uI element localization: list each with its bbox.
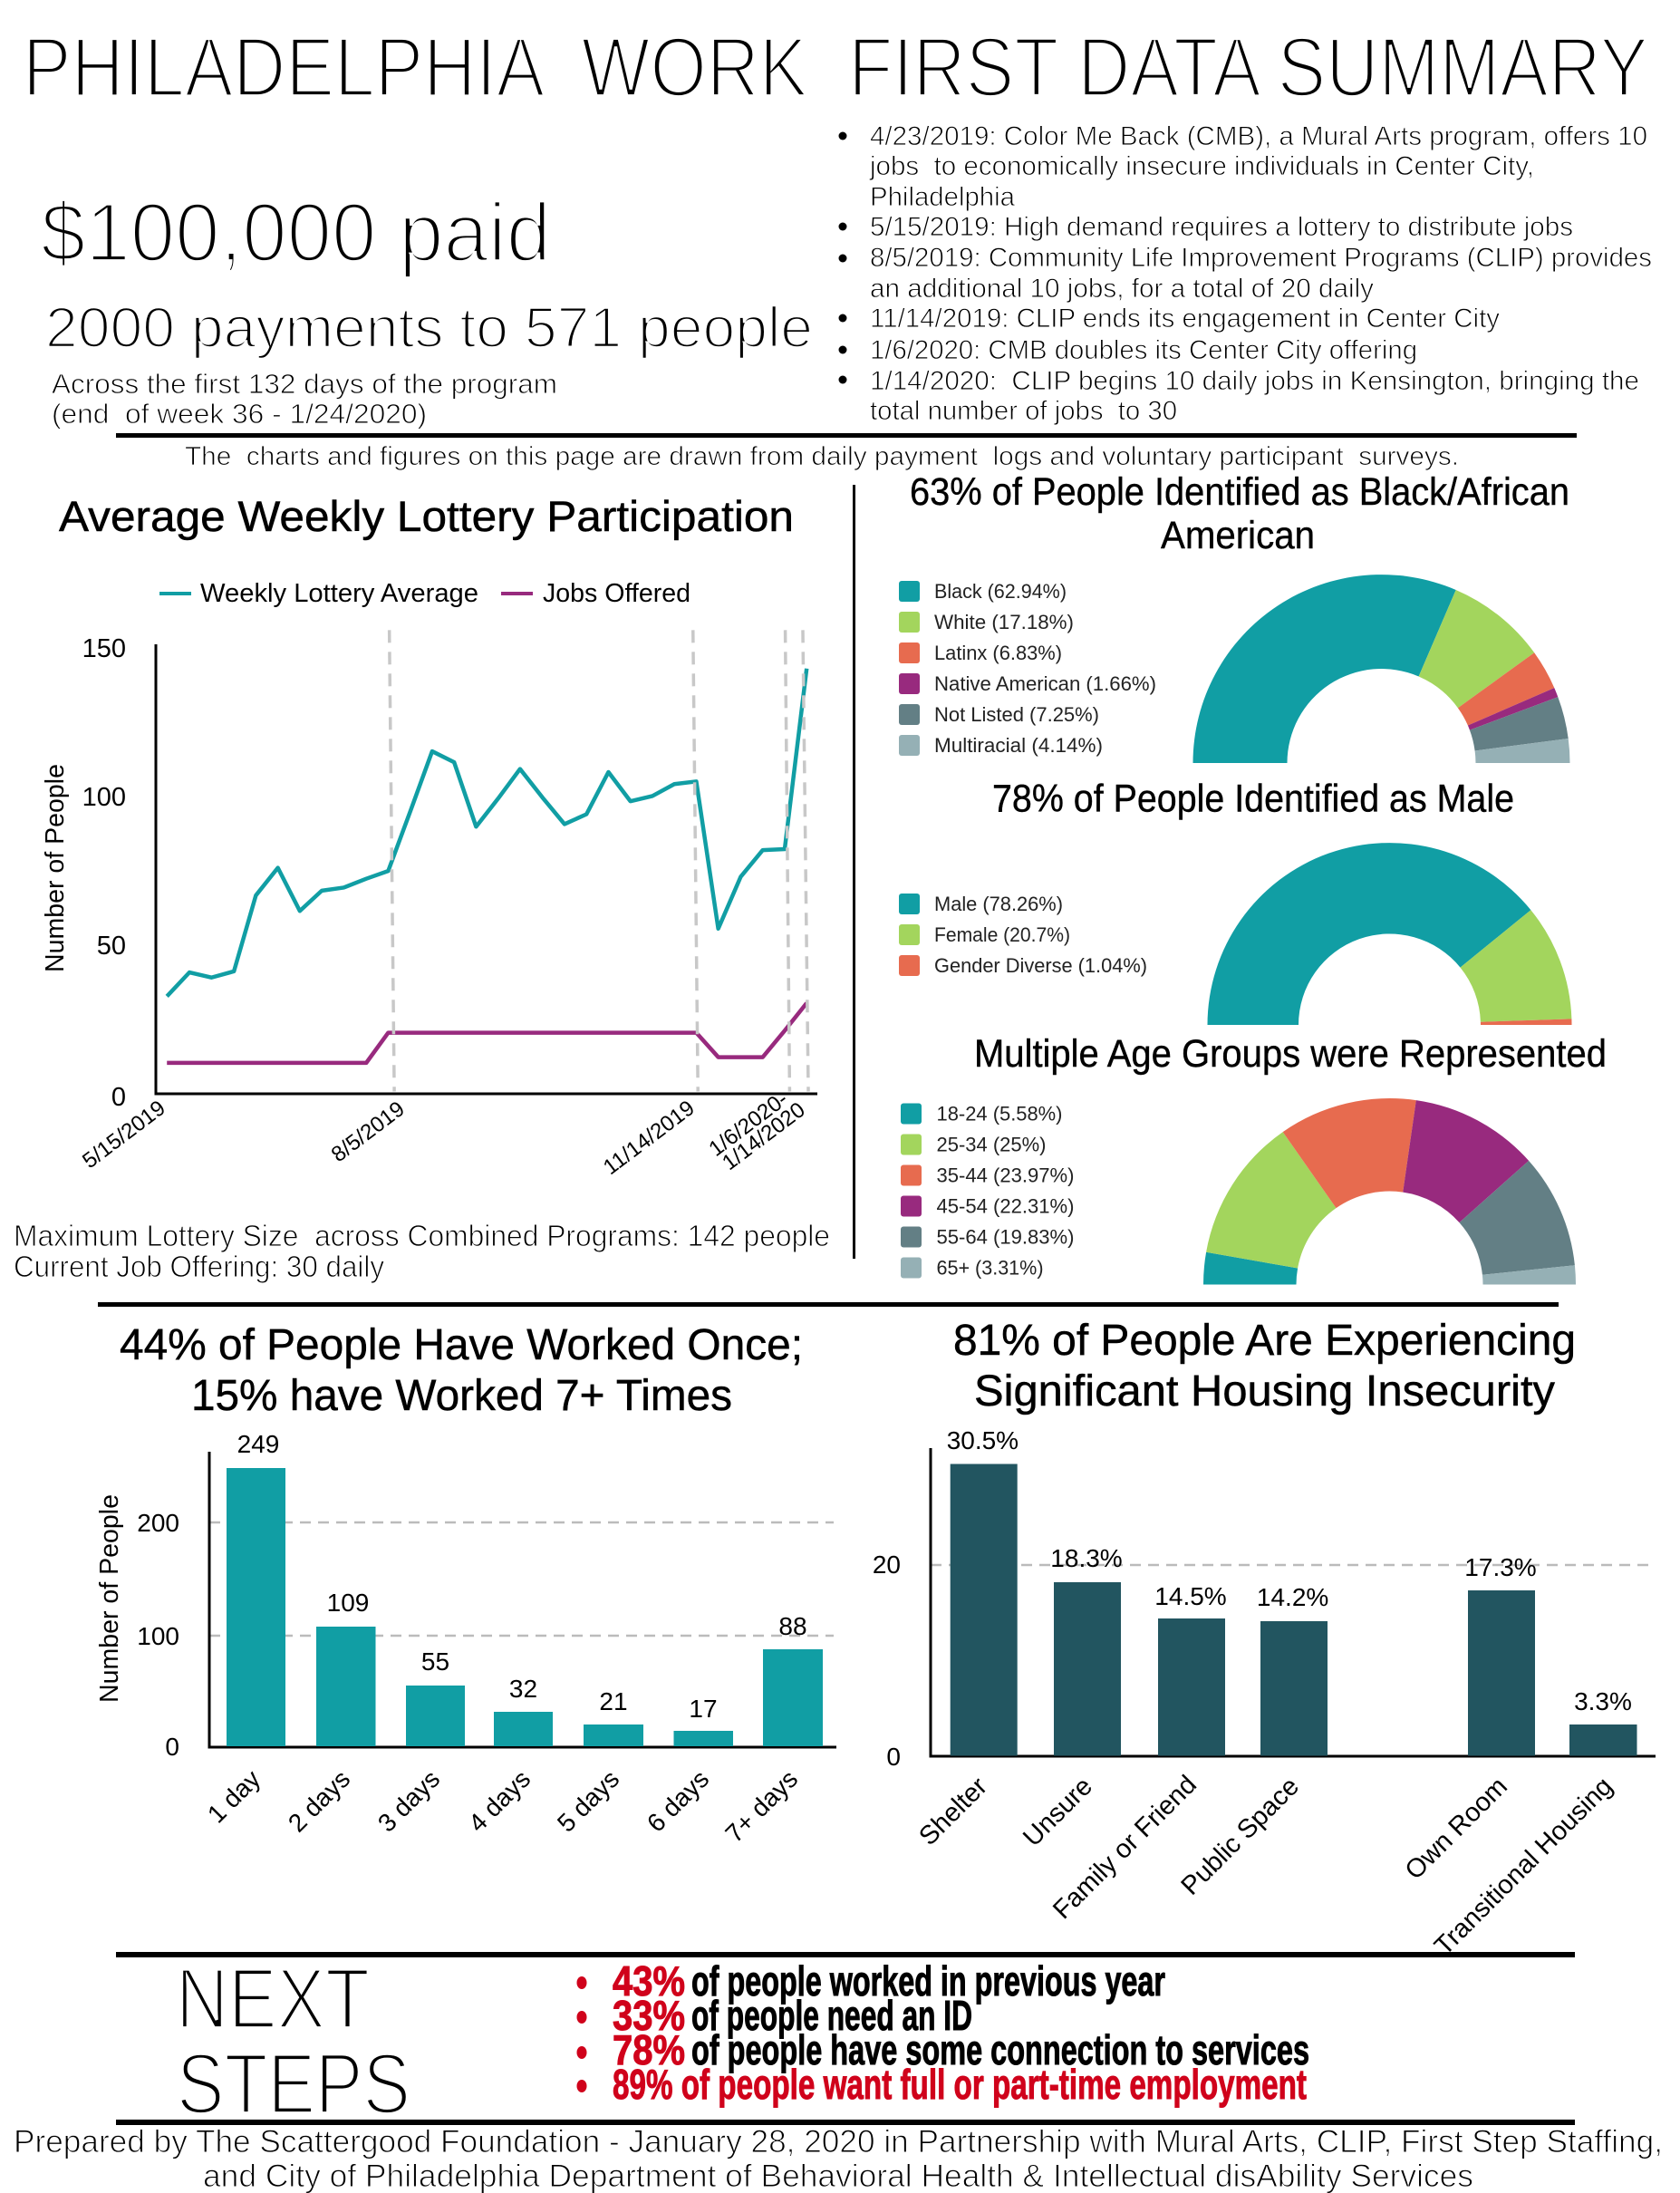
legend: race: Multiracial (4.14%) xyxy=(934,734,1103,757)
category labels: Unsure xyxy=(1018,1772,1098,1852)
category labels: 6 days xyxy=(642,1764,714,1838)
axes xyxy=(931,1448,1656,1756)
line: jobs offered xyxy=(167,1003,806,1063)
heading: next steps: STEPS xyxy=(177,2036,410,2132)
timeline list: Philadelphia xyxy=(870,182,1015,212)
legend: age: 25-34 (25%) xyxy=(937,1133,1046,1156)
x axis date labels: 1/14/2020 xyxy=(718,1097,810,1175)
axes xyxy=(209,1452,836,1747)
legend: race: Not Listed (7.25%) xyxy=(934,703,1099,726)
category labels: 2 days xyxy=(283,1764,355,1838)
heading: housing: 81% of People Are Experiencing xyxy=(953,1317,1576,1365)
heading: age: Multiple Age Groups were Represented xyxy=(974,1032,1607,1076)
y axis labels xyxy=(82,634,126,1112)
bar value labels: 109 xyxy=(327,1589,369,1617)
category labels: 1 day xyxy=(202,1764,266,1829)
footer credits xyxy=(14,2124,1663,2193)
headline stats xyxy=(41,187,813,430)
heading: next steps xyxy=(176,1951,410,2132)
legend: race: White (17.18%) xyxy=(934,611,1074,633)
category labels xyxy=(913,1770,1618,1961)
stat: total paid: $100,000 paid xyxy=(41,187,551,279)
legend: lottery chart: Jobs Offered xyxy=(543,579,690,608)
category labels: 3 days xyxy=(372,1764,445,1838)
chart: race half donut xyxy=(1192,575,1569,763)
data source caption: The charts and figures on this page are drawn from daily payment logs and voluntary participant surveys. xyxy=(185,442,1459,471)
category labels: 5 days xyxy=(552,1764,624,1838)
category labels: Transitional Housing xyxy=(1429,1772,1618,1961)
lottery callout xyxy=(14,1219,830,1283)
timeline list: total number of jobs to 30 xyxy=(870,396,1177,426)
bar value labels: 21 xyxy=(599,1687,628,1715)
heading: race: 63% of People Identified as Black/African xyxy=(910,470,1569,514)
lottery callout: Current Job Offering: 30 daily xyxy=(14,1250,384,1283)
timeline list: jobs to economically insecure individuals in Center City, xyxy=(869,151,1534,181)
bar value labels xyxy=(947,1426,1632,1715)
bar value labels: 32 xyxy=(509,1675,537,1703)
chart: gender half donut xyxy=(1207,843,1572,1025)
next steps list: of people need an ID xyxy=(691,1992,972,2039)
legend: gender xyxy=(899,893,1147,977)
y axis labels: 100 xyxy=(82,783,126,812)
category labels xyxy=(202,1764,803,1848)
stat note line 2: (end of week 36 - 1/24/2020) xyxy=(52,398,427,430)
bars xyxy=(951,1464,1637,1756)
category labels: 4 days xyxy=(463,1764,536,1838)
next steps list: 78% xyxy=(613,2026,685,2073)
legend: gender: Gender Diverse (1.04%) xyxy=(934,954,1147,977)
category labels: Shelter xyxy=(913,1772,993,1851)
bar value labels: 14.2% xyxy=(1257,1583,1328,1611)
heading: days worked xyxy=(120,1321,803,1420)
next steps list: of people worked in previous year xyxy=(691,1957,1165,2005)
category labels: 7+ days xyxy=(719,1764,803,1848)
axes xyxy=(156,644,817,1094)
next steps list xyxy=(576,1957,1309,2108)
timeline list: 1/14/2020: CLIP begins 10 daily jobs in Kensington, bringing the xyxy=(870,366,1639,396)
y axis labels: 0 xyxy=(111,1083,126,1112)
bar value labels: 55 xyxy=(421,1647,449,1676)
bar value labels: 30.5% xyxy=(947,1426,1019,1454)
bar value labels xyxy=(237,1430,807,1723)
panel: weekly lottery line chart xyxy=(14,492,830,1283)
legend: race: Latinx (6.83%) xyxy=(934,642,1062,664)
heading: housing xyxy=(953,1317,1576,1415)
x axis date labels xyxy=(78,1087,810,1180)
legend: race: Black (62.94%) xyxy=(934,580,1067,603)
y axis labels: 200 xyxy=(137,1509,179,1537)
stat: payments and people: 2000 payments to 571 people xyxy=(45,296,813,360)
heading: race xyxy=(910,470,1569,557)
heading: gender: 78% of People Identified as Male xyxy=(992,778,1514,821)
heading: lottery chart: Average Weekly Lottery Participation xyxy=(59,492,794,540)
legend: race xyxy=(899,580,1156,757)
bars xyxy=(227,1468,823,1746)
program milestone markers xyxy=(390,630,808,1091)
x axis date labels: 11/14/2019 xyxy=(599,1096,700,1180)
category labels: Family or Friend xyxy=(1048,1770,1202,1925)
y axis title: Number of People xyxy=(95,1494,124,1703)
legend: age xyxy=(901,1102,1075,1280)
category labels: Own Room xyxy=(1400,1772,1513,1886)
heading: housing: Significant Housing Insecurity xyxy=(974,1367,1555,1415)
y axis title: Number of People xyxy=(41,764,70,972)
x axis date labels: 1/6/2020- xyxy=(704,1087,793,1162)
legend: gender: Female (20.7%) xyxy=(934,923,1070,946)
legend: age: 35-44 (23.97%) xyxy=(937,1164,1075,1187)
legend: lottery chart xyxy=(159,579,690,608)
lottery callout: Maximum Lottery Size across Combined Programs: 142 people xyxy=(14,1219,830,1252)
next steps list: 89% of people want full or part-time employment xyxy=(613,2061,1307,2108)
bar value labels: 17 xyxy=(689,1695,718,1723)
next steps list: 43% xyxy=(613,1957,685,2005)
bar value labels: 14.5% xyxy=(1154,1582,1227,1610)
category labels: Public Space xyxy=(1176,1772,1305,1901)
timeline list: 8/5/2019: Community Life Improvement Programs (CLIP) provides xyxy=(870,243,1652,273)
panel: age groups xyxy=(901,1032,1607,1285)
panel: housing bar chart xyxy=(873,1317,1656,1961)
y axis labels xyxy=(137,1509,179,1761)
x axis date labels: 8/5/2019 xyxy=(327,1096,410,1167)
timeline list: 4/23/2019: Color Me Back (CMB), a Mural Arts program, offers 10 xyxy=(870,121,1647,151)
y axis labels: 20 xyxy=(873,1551,901,1579)
legend: age: 65+ (3.31%) xyxy=(937,1256,1044,1280)
stat note line 1: Across the first 132 days of the program xyxy=(52,368,557,400)
y axis labels: 50 xyxy=(97,932,126,961)
bar value labels: 17.3% xyxy=(1464,1553,1537,1581)
legend: race: Native American (1.66%) xyxy=(934,672,1156,695)
footer credits: and City of Philadelphia Department of Behavioral Health & Intellectual disAbility Services xyxy=(203,2159,1473,2193)
timeline list: 11/14/2019: CLIP ends its engagement in Center City xyxy=(870,304,1500,333)
chart: age half donut xyxy=(1203,1098,1576,1285)
y axis labels xyxy=(873,1551,901,1771)
timeline list xyxy=(839,121,1652,426)
heading: days worked: 44% of People Have Worked Once; xyxy=(120,1321,803,1369)
heading: next steps: NEXT xyxy=(176,1951,370,2047)
panel: race and ethnicity xyxy=(899,470,1569,763)
legend: lottery chart: Weekly Lottery Average xyxy=(200,579,478,608)
heading: days worked: 15% have Worked 7+ Times xyxy=(191,1372,732,1420)
line: weekly lottery average xyxy=(167,669,806,996)
bar value labels: 249 xyxy=(237,1430,279,1458)
timeline list: 1/6/2020: CMB doubles its Center City offering xyxy=(870,335,1417,365)
x axis date labels: 5/15/2019 xyxy=(78,1096,170,1174)
footer credits: Prepared by The Scattergood Foundation - January 28, 2020 in Partnership with Mural Arts, CLIP, First Step Staffing, xyxy=(14,2124,1663,2159)
bar value labels: 88 xyxy=(778,1612,807,1640)
legend: age: 55-64 (19.83%) xyxy=(937,1225,1075,1249)
legend: gender: Male (78.26%) xyxy=(934,893,1063,915)
timeline list: an additional 10 jobs, for a total of 20 daily xyxy=(870,274,1374,304)
bar value labels: 3.3% xyxy=(1574,1687,1632,1715)
bar value labels: 18.3% xyxy=(1050,1544,1123,1572)
y axis labels: 100 xyxy=(137,1622,179,1650)
legend: age: 18-24 (5.58%) xyxy=(937,1102,1062,1125)
y axis labels: 150 xyxy=(82,634,126,663)
heading: race: American xyxy=(1161,514,1315,557)
next steps list: of people have some connection to services xyxy=(691,2026,1309,2073)
panel: days worked bar chart xyxy=(95,1321,836,1848)
panel: gender xyxy=(899,778,1572,1025)
legend: age: 45-54 (22.31%) xyxy=(937,1194,1075,1218)
y axis labels: 0 xyxy=(165,1733,179,1761)
timeline list: 5/15/2019: High demand requires a lottery to distribute jobs xyxy=(870,212,1573,242)
y axis labels: 0 xyxy=(886,1743,901,1771)
next steps list: 33% xyxy=(613,1992,685,2039)
line plot xyxy=(167,630,808,1091)
